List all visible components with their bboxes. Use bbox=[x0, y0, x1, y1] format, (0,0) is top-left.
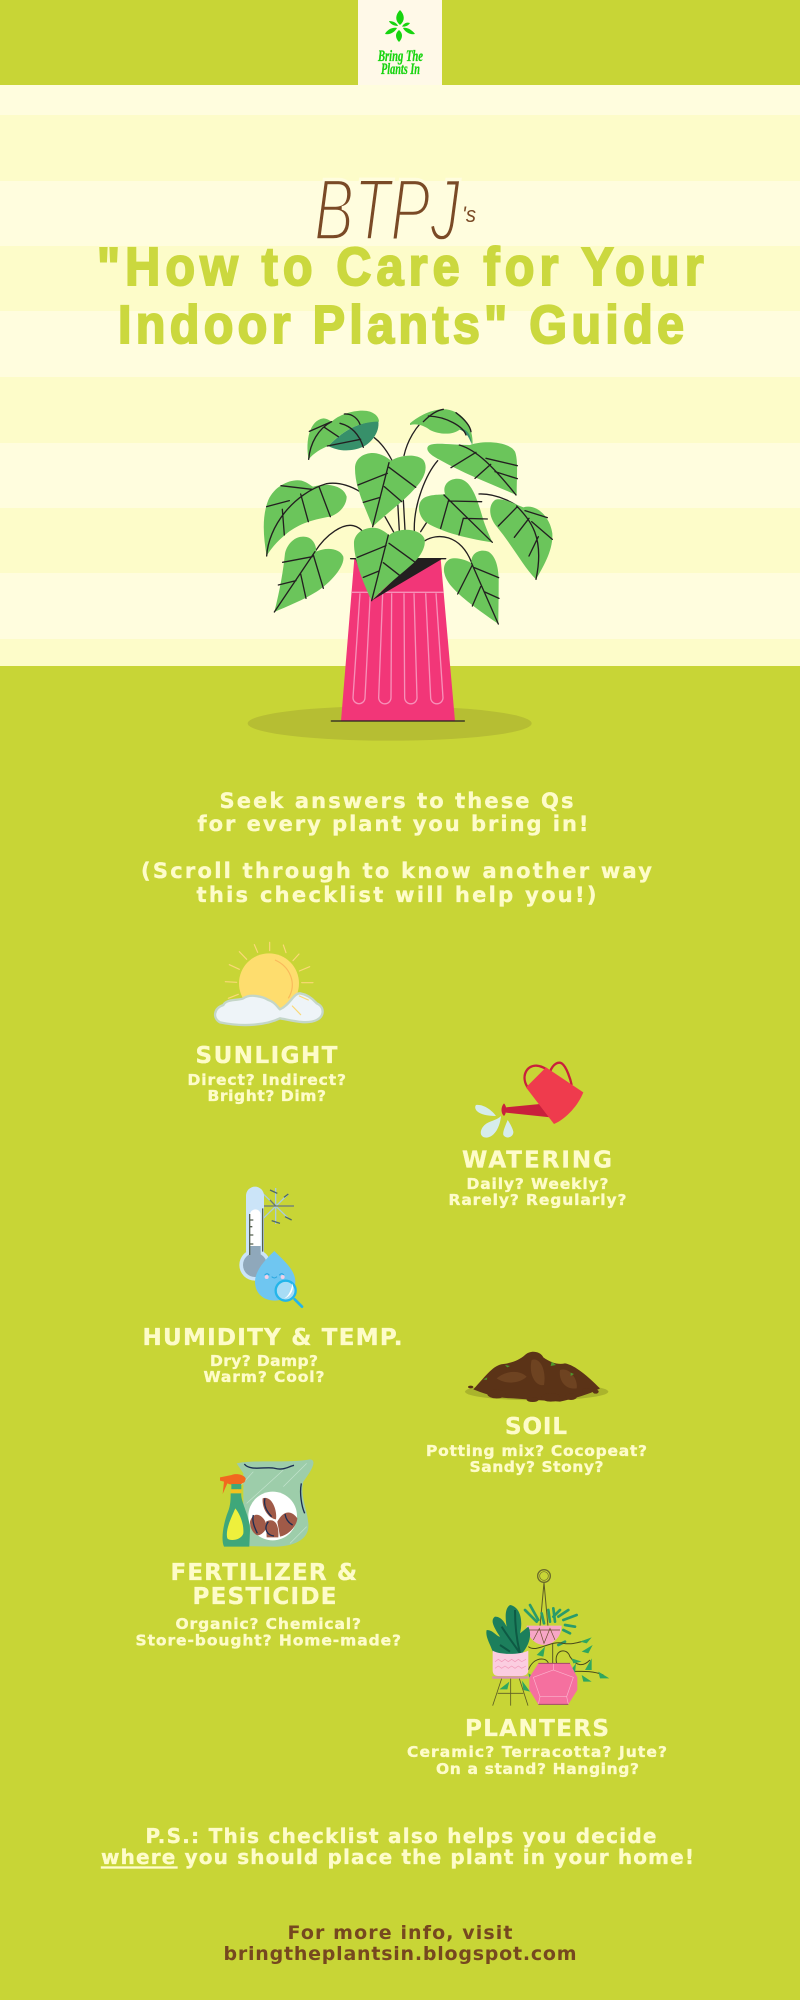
panel: soil bbox=[426, 1352, 647, 1476]
postscript note: P.S.: This checklist also helps you decide bbox=[146, 1824, 656, 1848]
icon: sun and cloud bbox=[215, 942, 323, 1025]
postscript note: where you should place the plant in your home! bbox=[101, 1845, 694, 1869]
questions: Organic? Chemical? bbox=[176, 1615, 361, 1633]
questions: Dry? Damp? bbox=[210, 1352, 318, 1370]
pot shadow bbox=[248, 706, 532, 741]
intro text: (Scroll through to know another way bbox=[141, 859, 652, 883]
leaf: lower right bbox=[444, 551, 499, 624]
leaf: front centre bbox=[354, 528, 425, 601]
leaf: top right bbox=[410, 409, 473, 445]
icon: fertilizer bag and spray bottle bbox=[220, 1459, 313, 1547]
leaf: far right bbox=[490, 499, 552, 579]
title bbox=[97, 236, 704, 355]
icon: thermometer, snowflake and water drop bbox=[239, 1187, 302, 1307]
leaf: right upper bbox=[427, 442, 517, 495]
questions: Direct? Indirect? bbox=[188, 1071, 346, 1089]
postscript note bbox=[101, 1824, 694, 1869]
pot bbox=[341, 559, 455, 721]
panel: humidity and temperature bbox=[142, 1187, 402, 1386]
title: Indoor Plants" Guide bbox=[118, 294, 684, 355]
icon: hanging and standing planters bbox=[486, 1570, 609, 1706]
script heading: BTPJ's: 's bbox=[462, 202, 476, 227]
icon: green flower leaves bbox=[385, 10, 415, 42]
questions bbox=[136, 1615, 401, 1650]
questions bbox=[448, 1175, 626, 1209]
logo: Bring The Plants In bbox=[358, 0, 442, 85]
questions: Rarely? Regularly? bbox=[448, 1191, 626, 1209]
heading: SUNLIGHT bbox=[196, 1043, 338, 1069]
panel: fertilizer and pesticide bbox=[136, 1459, 401, 1650]
questions: Sandy? Stony? bbox=[470, 1458, 604, 1476]
heading: PLANTERS bbox=[465, 1716, 609, 1742]
questions bbox=[426, 1442, 647, 1476]
intro text: Seek answers to these Qs bbox=[220, 789, 574, 813]
panel: sunlight bbox=[188, 942, 346, 1105]
heading bbox=[170, 1560, 357, 1610]
questions: Daily? Weekly? bbox=[466, 1175, 608, 1193]
script heading: BTPJ's: BTPJ bbox=[314, 160, 461, 259]
questions: Bright? Dim? bbox=[208, 1087, 326, 1105]
footer: more info: For more info, visit bbox=[288, 1922, 512, 1944]
stems bbox=[315, 415, 527, 563]
questions: Warm? Cool? bbox=[204, 1368, 324, 1386]
illustration: potted plant bbox=[248, 409, 552, 741]
icon: watering can bbox=[475, 1063, 583, 1138]
pot grooves bbox=[352, 592, 444, 704]
panel: planters bbox=[407, 1570, 667, 1778]
leaf: top left bbox=[307, 411, 379, 459]
questions bbox=[407, 1743, 667, 1778]
logo wordmark bbox=[377, 48, 423, 78]
title: "How to Care for Your bbox=[97, 236, 704, 297]
questions bbox=[204, 1352, 324, 1386]
questions bbox=[188, 1071, 346, 1105]
icon: soil pile bbox=[465, 1352, 608, 1402]
panel: watering bbox=[448, 1063, 626, 1209]
intro text: for every plant you bring in! bbox=[198, 812, 588, 836]
pot rims and opening bbox=[331, 558, 464, 721]
questions: Potting mix? Cocopeat? bbox=[426, 1442, 647, 1460]
intro text: this checklist will help you!) bbox=[196, 883, 596, 907]
footer: more info: bringtheplantsin.blogspot.com bbox=[224, 1943, 576, 1965]
leaf: lower left bbox=[274, 537, 343, 612]
leaf: upper centre bbox=[355, 453, 426, 527]
heading: SOIL bbox=[505, 1414, 567, 1440]
heading: FERTILIZER & bbox=[170, 1560, 357, 1586]
questions: On a stand? Hanging? bbox=[436, 1760, 639, 1778]
heading: HUMIDITY & TEMP. bbox=[142, 1325, 402, 1351]
footer: more info bbox=[224, 1922, 576, 1965]
heading: WATERING bbox=[462, 1148, 612, 1174]
intro text bbox=[141, 789, 652, 907]
questions: Store-bought? Home-made? bbox=[136, 1632, 401, 1650]
heading: PESTICIDE bbox=[192, 1584, 336, 1610]
questions: Ceramic? Terracotta? Jute? bbox=[407, 1743, 667, 1761]
leaf: middle right bbox=[419, 479, 492, 542]
logo wordmark: Plants In bbox=[380, 61, 420, 78]
logo wordmark: Bring The bbox=[377, 48, 423, 65]
leaf: far left upper bbox=[264, 480, 347, 556]
